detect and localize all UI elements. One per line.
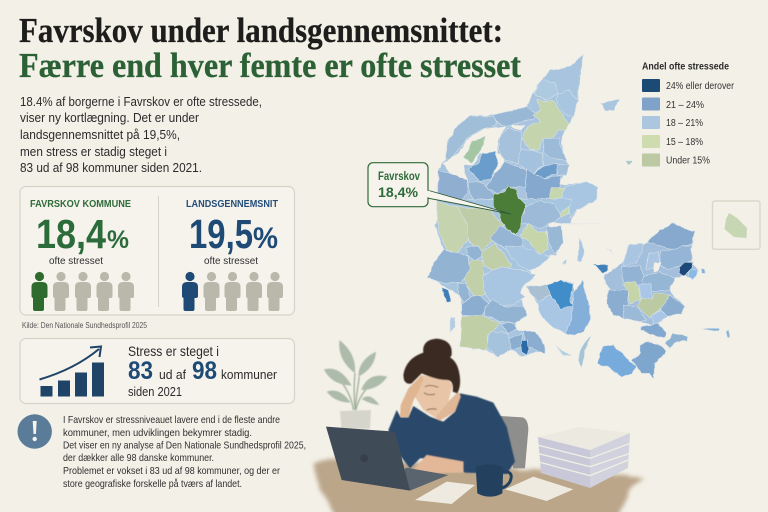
facial features xyxy=(424,385,438,410)
chair xyxy=(500,416,528,468)
trend text: siden 2021 xyxy=(128,384,182,399)
note text xyxy=(63,414,306,490)
table xyxy=(315,458,643,512)
legend item: 15-18: 15 – 18% xyxy=(666,137,703,148)
intro text: viser ny kortlægning. Det er under xyxy=(20,111,199,125)
region: southern Jutland and Funen xyxy=(428,198,592,368)
plant xyxy=(324,340,387,429)
face xyxy=(415,375,453,417)
illustration: stressed woman at desk xyxy=(315,339,643,512)
trend text xyxy=(128,343,278,399)
icons: national people xyxy=(182,272,283,311)
icon: rising bars xyxy=(40,346,104,396)
Favrskov value: 18,4 xyxy=(36,211,106,257)
note text: Det viser en ny analyse af Den Nationale Sundhedsprofil 2025, xyxy=(63,440,306,452)
legend item: 18-21: 18 – 21% xyxy=(666,118,703,129)
intro text xyxy=(20,95,262,175)
icons: Favrskov people xyxy=(32,272,134,311)
laptop xyxy=(326,427,448,491)
source: Kilde: Den Nationale Sundhedsprofil 2025 xyxy=(22,321,147,330)
legend item: under 15: Under 15% xyxy=(666,156,710,166)
Favrskov value: % xyxy=(107,226,129,254)
coffee mug xyxy=(476,464,511,497)
neck xyxy=(435,392,461,421)
title xyxy=(19,11,521,85)
intro text: landsgennemsnittet på 19,5%, xyxy=(20,128,180,142)
note text: I Favrskov er stressniveauet lavere end i de fleste andre xyxy=(63,414,280,426)
note text: der dækker alle 98 danske kommuner. xyxy=(63,452,214,464)
title: Favrskov under landsgennemsnittet: xyxy=(19,11,503,50)
inset: Bornholm xyxy=(712,201,760,249)
trend text: 83 xyxy=(128,357,153,385)
hair xyxy=(403,339,460,393)
legend item: 24% or more: 24% eller derover xyxy=(666,81,735,92)
panel: trend xyxy=(20,338,294,404)
note text: store geografiske forskelle på tværs af landet. xyxy=(63,478,242,490)
intro text: 18.4% af borgerne i Favrskov er ofte stressede, xyxy=(20,95,262,109)
region: small northern islands xyxy=(601,99,632,165)
note text: kommuner, men udviklingen bekymrer stadig. xyxy=(63,427,252,439)
hand on keyboard xyxy=(413,455,463,473)
callout: Favrskov xyxy=(368,163,511,214)
national caption: ofte stresset xyxy=(204,255,258,267)
trend text: 98 xyxy=(192,357,217,385)
Favrskov label: FAVRSKOV KOMMUNE xyxy=(30,198,131,210)
legend xyxy=(642,62,735,166)
choropleth map of Denmark xyxy=(428,54,730,380)
region: northern Jutland xyxy=(437,54,600,223)
region: Favrskov xyxy=(493,186,526,235)
callout: Favrskov: Favrskov xyxy=(378,171,420,183)
region: Zealand and southern islands xyxy=(593,223,730,380)
paper stack xyxy=(537,427,630,488)
Favrskov caption: ofte stresset xyxy=(49,255,103,267)
title: Færre end hver femte er ofte stresset xyxy=(19,47,521,85)
icon: alert xyxy=(18,414,52,449)
legend: Andel ofte stressede xyxy=(642,62,729,72)
national value: % xyxy=(253,222,278,255)
national label: LANDSGENNEMSNIT xyxy=(186,198,279,210)
intro text: men stress er stadig steget i xyxy=(20,145,167,159)
raised hand xyxy=(400,375,423,417)
legend item: 21-24: 21 – 24% xyxy=(666,100,704,111)
callout: Favrskov: 18,4% xyxy=(378,184,419,200)
papers xyxy=(415,477,573,504)
intro text: 83 ud af 98 kommuner siden 2021. xyxy=(20,161,202,175)
national value: 19,5 xyxy=(189,211,253,257)
trend text: Stress er steget i xyxy=(128,343,219,359)
trend text: kommuner xyxy=(221,367,278,382)
sweater xyxy=(388,393,515,474)
note text: Problemet er vokset i 83 ud af 98 kommuner, og der er xyxy=(63,465,280,477)
woman xyxy=(388,339,515,474)
trend text: ud af xyxy=(159,367,186,382)
panel: comparison xyxy=(20,186,294,315)
